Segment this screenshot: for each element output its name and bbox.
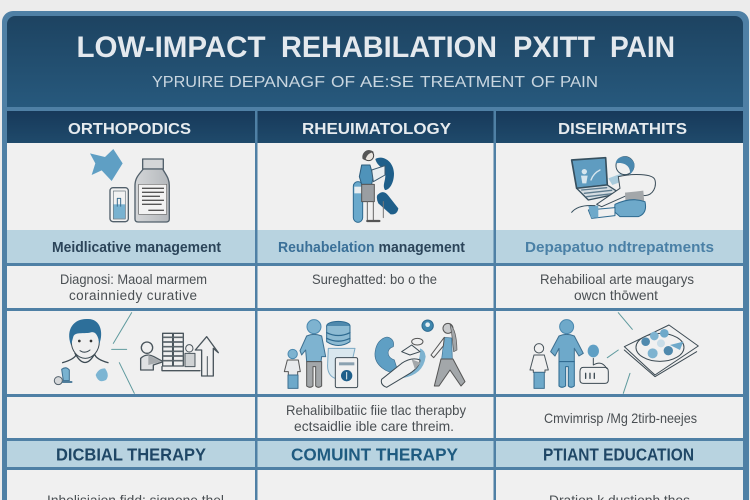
icon: person consulting — [353, 150, 398, 222]
column headers: ORTHOPODICS — [68, 121, 191, 138]
text block: community therapy: Rehalibilbatiic fiie tlac therapby — [286, 402, 466, 418]
icon: medication bottle and device — [90, 149, 169, 222]
icon: patient portrait with book stack — [54, 313, 218, 393]
text block: community therapy — [286, 402, 466, 434]
title: PXITT — [513, 31, 595, 64]
band heading: comuint therapy: COMUINT THERAPY — [291, 444, 458, 464]
text block: rheumatology: Sureghatted: bo o the — [312, 271, 437, 287]
icon: person with laptop — [572, 156, 655, 218]
title — [76, 31, 675, 64]
band label: departments: Depapatuo ndtrepatments — [525, 240, 714, 256]
subtitle: AE:SE — [360, 74, 414, 91]
text block: orthopedics: corainniedy curative — [69, 288, 197, 303]
band label: rehabilitation management: Reuhabelation management — [278, 240, 465, 256]
text block: orthopedics: Diagnosi: Maoal marmem — [60, 271, 207, 287]
subtitle — [152, 74, 598, 91]
subtitle: YPRUIRE — [152, 74, 224, 91]
band heading: dicbial therapy: DICBIAL THERAPY — [56, 444, 206, 464]
text block: community therapy: ectsaidlie ible care threim. — [294, 418, 454, 434]
icon: family and therapy — [284, 320, 465, 388]
title: LOW-IMPACT — [76, 31, 266, 64]
subtitle: PAIN — [560, 74, 598, 91]
column headers: DISEIRMATHITS — [558, 121, 687, 138]
text block: patient education: Cmvimrisp /Mg 2tirb-neejes — [544, 410, 697, 426]
title: REHABILATION — [281, 31, 497, 64]
text block: rehabilitation: Rehabilioal arte maugarys — [540, 271, 694, 287]
subtitle: OF — [531, 74, 555, 91]
subtitle: TREATMENT — [420, 74, 525, 91]
band label: medicative management: Meidlicative management — [52, 240, 221, 256]
title: PAIN — [610, 31, 675, 64]
text block: rehabilitation — [540, 271, 694, 303]
column headers — [68, 121, 687, 138]
text block: rehabilitation: owcn thōwent — [574, 287, 658, 303]
subtitle: OF — [331, 74, 355, 91]
icon: family with tablets — [530, 313, 698, 393]
band heading: patient education: PTIANT EDUCATION — [543, 444, 694, 464]
subtitle: DEPANAGF — [229, 74, 325, 91]
column headers: RHEUIMATOLOGY — [302, 121, 451, 138]
text block: orthopedics — [60, 271, 207, 303]
